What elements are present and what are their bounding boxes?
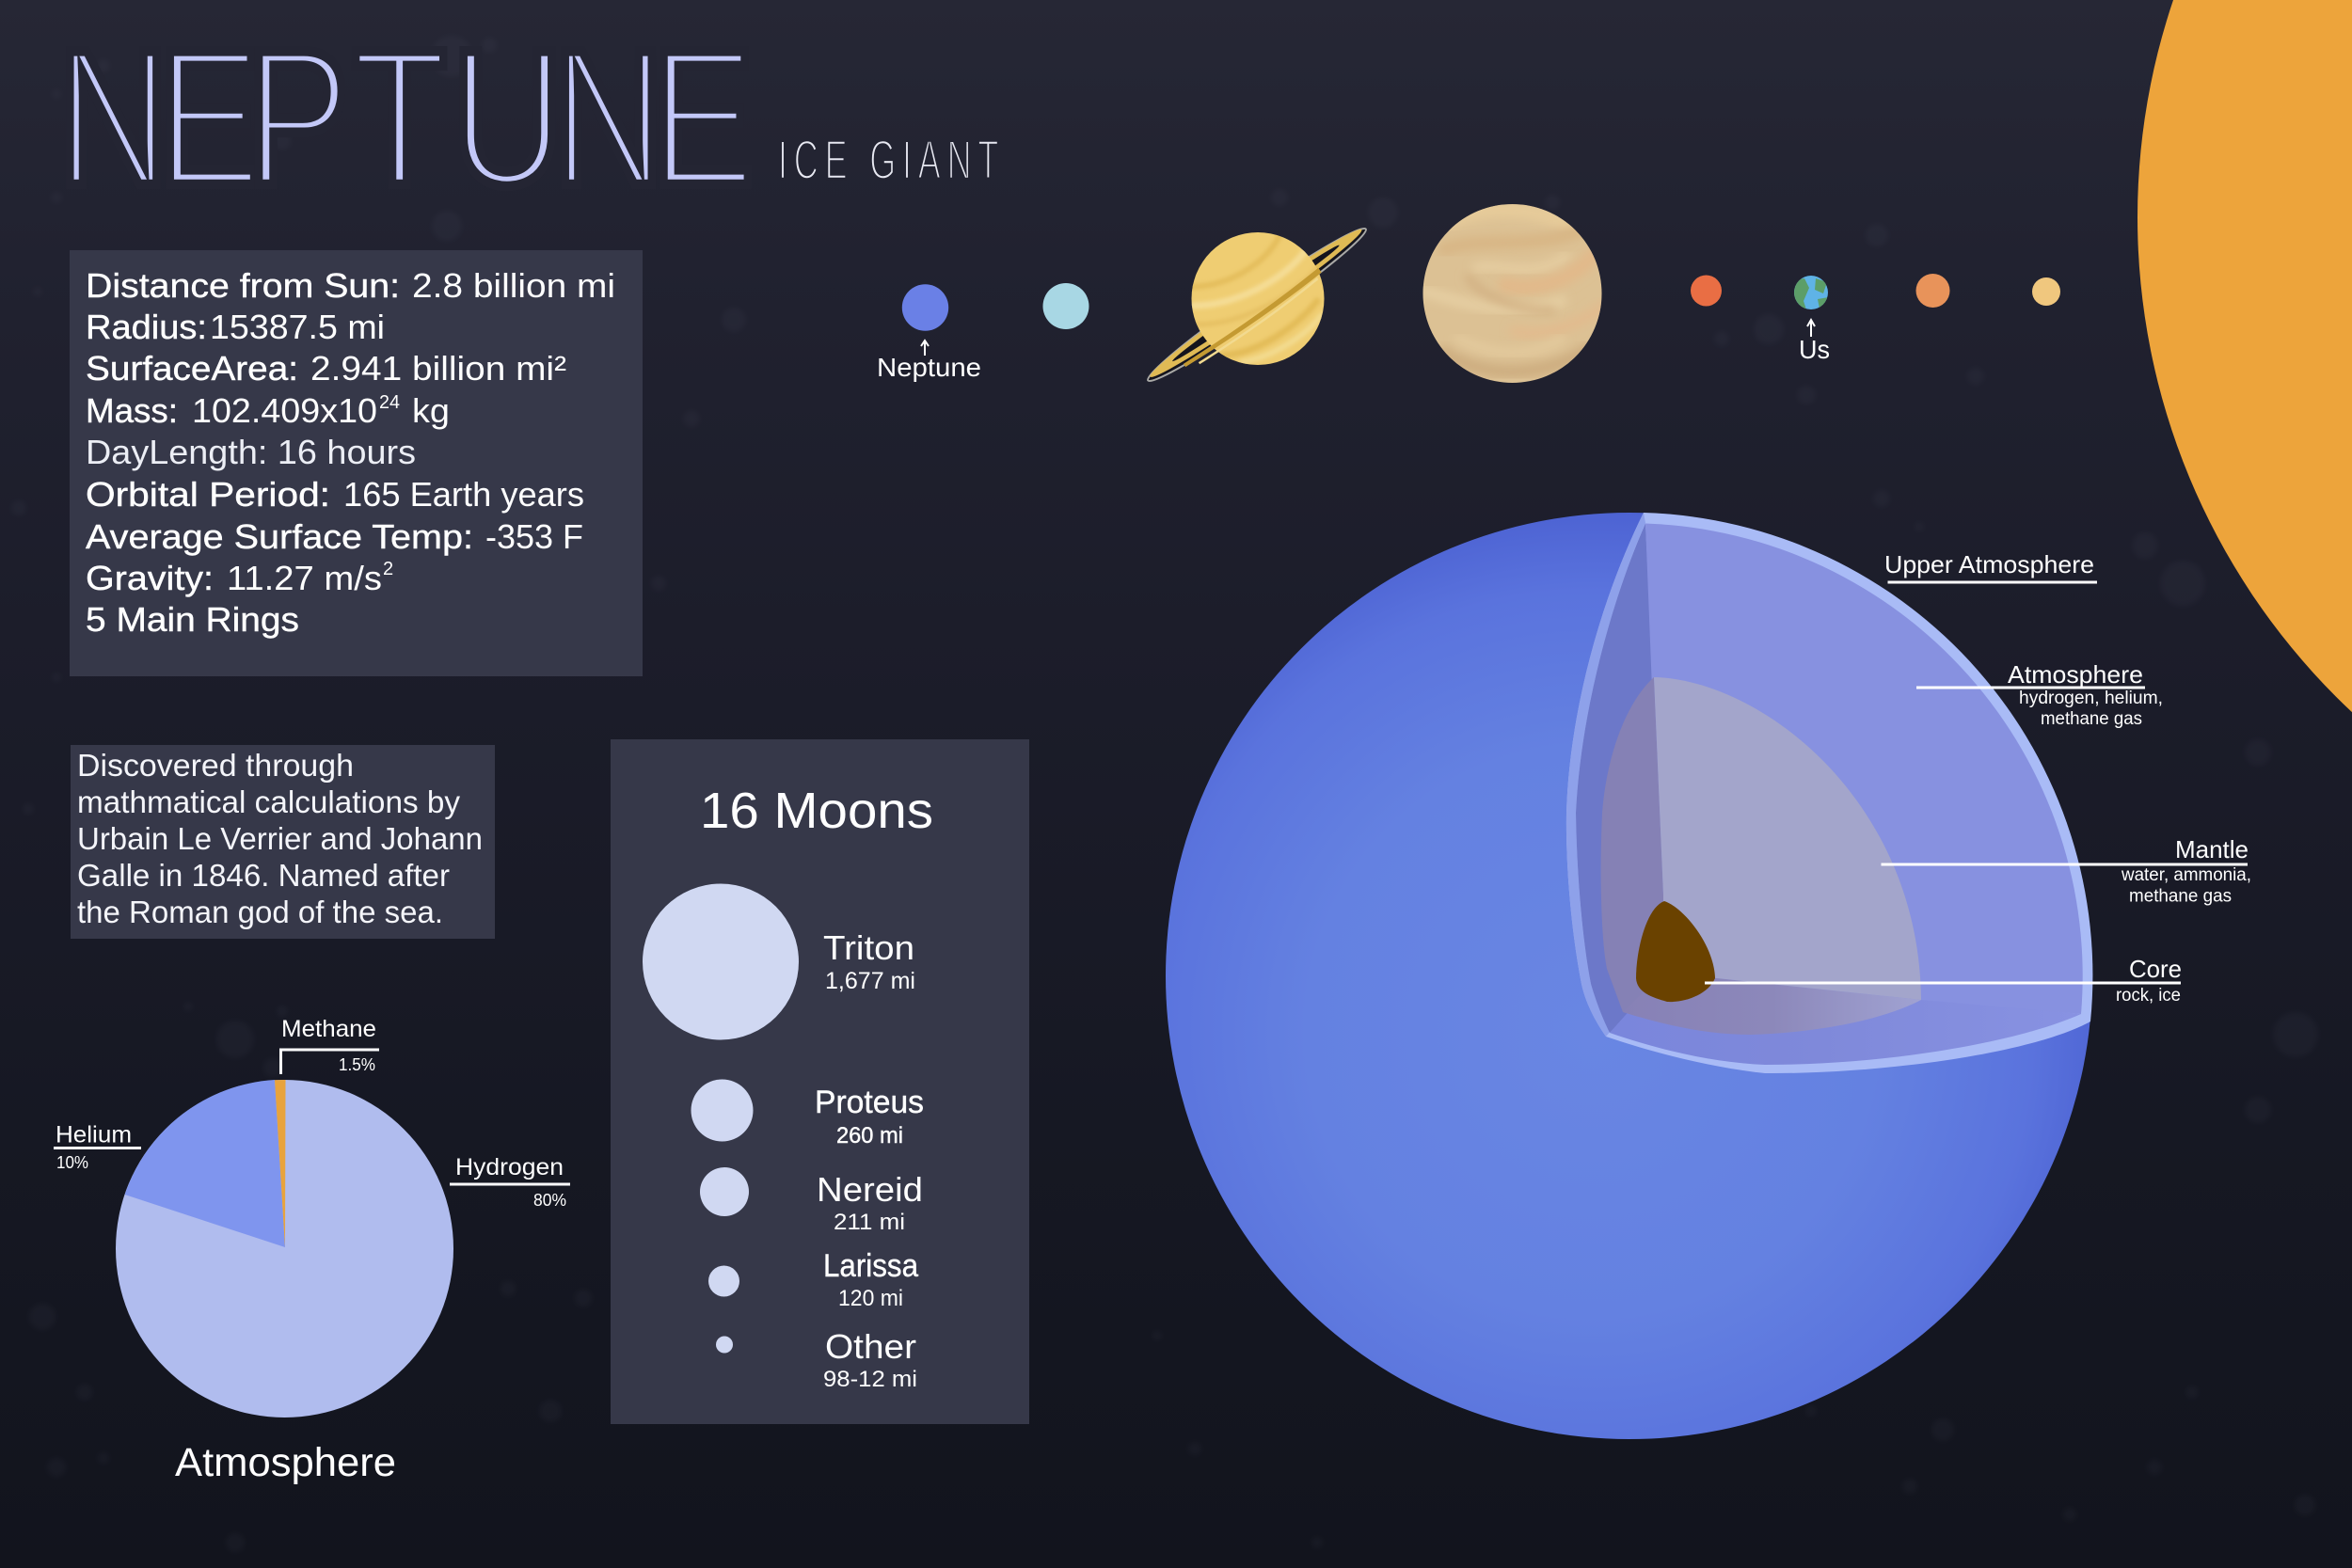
stat: radius xyxy=(86,308,385,346)
discovery text: Urbain Le Verrier and Johann xyxy=(77,821,483,856)
moon: triton: Triton xyxy=(823,928,914,967)
stat: mass: 102.409x10 xyxy=(192,391,377,430)
stat: mass: 24 xyxy=(379,392,400,413)
label: core xyxy=(1705,955,2182,1006)
moon: nereid: Nereid xyxy=(817,1170,923,1209)
cutaway: left rim shade xyxy=(1566,513,1645,1037)
title: NEPTUNE: NEPTUNE xyxy=(57,8,755,226)
planet: neptune: Neptune xyxy=(877,353,981,382)
moon: larissa: Larissa xyxy=(823,1248,918,1284)
stat: distance from sun xyxy=(86,266,615,305)
cutaway: atmosphere right face xyxy=(1645,523,2083,1014)
stat: distance from sun: Distance from Sun: xyxy=(86,266,400,305)
cutaway: upper atmosphere rim xyxy=(1566,513,2092,1073)
pie chart: atmosphere xyxy=(54,1016,570,1485)
moon: proteus: 260 mi xyxy=(836,1123,903,1148)
label: methane xyxy=(280,1016,379,1074)
moon: other: 98-12 mi xyxy=(823,1367,917,1392)
cutaway: mantle bottom face xyxy=(1623,973,1921,1035)
stat: surface area xyxy=(86,349,566,388)
label: atmosphere: hydrogen, helium, xyxy=(2019,689,2163,708)
planet: venus xyxy=(1915,274,1949,308)
stat: mass: Mass: xyxy=(86,391,178,430)
stat: gravity: 11.27 m/s xyxy=(227,559,382,597)
label: helium: 10% xyxy=(56,1152,88,1172)
stat: mass: kg xyxy=(412,391,450,430)
stat: gravity: 2 xyxy=(383,559,393,579)
label: hydrogen: 80% xyxy=(533,1190,566,1210)
stat: orbital period: 165 Earth years xyxy=(343,475,584,514)
stat: gravity xyxy=(86,559,393,597)
moon: nereid xyxy=(700,1167,923,1235)
label: mantle: water, ammonia, xyxy=(2121,865,2251,885)
subtitle: ice giant: ICE GIANT xyxy=(778,130,998,191)
label: mantle: methane gas xyxy=(2129,886,2232,907)
stat: surface temperature: Average Surface Temp: xyxy=(86,517,473,556)
sun xyxy=(2137,0,2352,895)
label: hydrogen xyxy=(450,1154,570,1210)
slice: hydrogen xyxy=(116,1080,453,1418)
label: atmosphere xyxy=(1916,660,2163,729)
stat: radius: 15387.5 mi xyxy=(210,308,385,346)
discovery text xyxy=(77,748,483,929)
stat: radius: Radius: xyxy=(86,308,207,346)
neptune cutaway planet xyxy=(1166,513,2092,1439)
stat: main rings: 5 Main Rings xyxy=(86,600,299,639)
panel: planet statistics xyxy=(70,250,643,676)
label: helium xyxy=(54,1121,141,1172)
label: hydrogen: Hydrogen xyxy=(455,1154,564,1180)
slice: helium xyxy=(125,1080,285,1247)
stat: gravity: Gravity: xyxy=(86,559,214,597)
moon: proteus xyxy=(691,1080,924,1148)
solar system lineup xyxy=(877,204,2060,389)
stat: orbital period xyxy=(86,475,584,514)
planet: uranus xyxy=(1042,283,1089,329)
label: core: rock, ice xyxy=(2116,986,2181,1006)
moon: other xyxy=(716,1327,917,1392)
moon: triton xyxy=(643,884,915,1040)
stat: surface area: SurfaceArea: xyxy=(86,349,298,388)
neptune sphere xyxy=(1166,513,2092,1439)
discovery text: mathmatical calculations by xyxy=(77,784,460,819)
label: mantle xyxy=(1882,835,2251,907)
planet: mars xyxy=(1691,275,1722,307)
planet: earth: Us xyxy=(1799,335,1830,364)
label: upper atmosphere: Upper Atmosphere xyxy=(1884,550,2094,578)
planet: earth xyxy=(1794,276,1829,359)
planet: saturn xyxy=(1147,228,1367,382)
label: mantle: Mantle xyxy=(2175,835,2249,863)
discovery text: Discovered through xyxy=(77,748,354,783)
slice: methane xyxy=(275,1080,286,1247)
panel: moons xyxy=(611,739,1029,1424)
panel: discovery note xyxy=(71,745,495,939)
saturn rings behind xyxy=(1141,220,1373,389)
label: methane: Methane xyxy=(281,1016,376,1042)
discovery text: Galle in 1846. Named after xyxy=(77,858,450,893)
stat: mass xyxy=(86,391,450,430)
label: atmosphere: methane gas xyxy=(2041,709,2142,729)
planet: neptune xyxy=(877,284,981,382)
moon: proteus: Proteus xyxy=(815,1085,924,1120)
moon: other: Other xyxy=(825,1327,916,1366)
cutaway: mantle right face xyxy=(1654,677,1921,1000)
moon: larissa: 120 mi xyxy=(838,1286,903,1311)
label: core: Core xyxy=(2129,955,2182,983)
moon: nereid: 211 mi xyxy=(834,1210,905,1235)
cutaway: mantle left face xyxy=(1601,677,1665,1012)
stat: distance from sun: 2.8 billion mi xyxy=(412,266,615,305)
cutaway: core xyxy=(1636,901,1715,1002)
moons heading: 16 Moons xyxy=(700,783,933,839)
pie chart caption: Atmosphere xyxy=(175,1440,396,1485)
moon: triton: 1,677 mi xyxy=(825,968,915,994)
stat: surface area: 2.941 billion mi² xyxy=(310,349,566,388)
discovery text: the Roman god of the sea. xyxy=(77,895,443,929)
saturn ring front band xyxy=(1183,268,1325,372)
stat: day length: DayLength: 16 hours xyxy=(86,433,416,471)
stat: surface temperature: -353 F xyxy=(485,517,583,556)
planet: mercury xyxy=(2032,277,2060,306)
stat: orbital period: Orbital Period: xyxy=(86,475,330,514)
moon: larissa xyxy=(708,1248,918,1311)
cutaway: atmosphere bottom face xyxy=(1610,973,2081,1065)
planet: jupiter xyxy=(1422,204,1604,383)
label: helium: Helium xyxy=(56,1121,132,1148)
label: atmosphere: Atmosphere xyxy=(2008,660,2143,689)
cutaway: atmosphere left face xyxy=(1576,523,1665,1033)
label: methane: 1.5% xyxy=(339,1054,375,1074)
